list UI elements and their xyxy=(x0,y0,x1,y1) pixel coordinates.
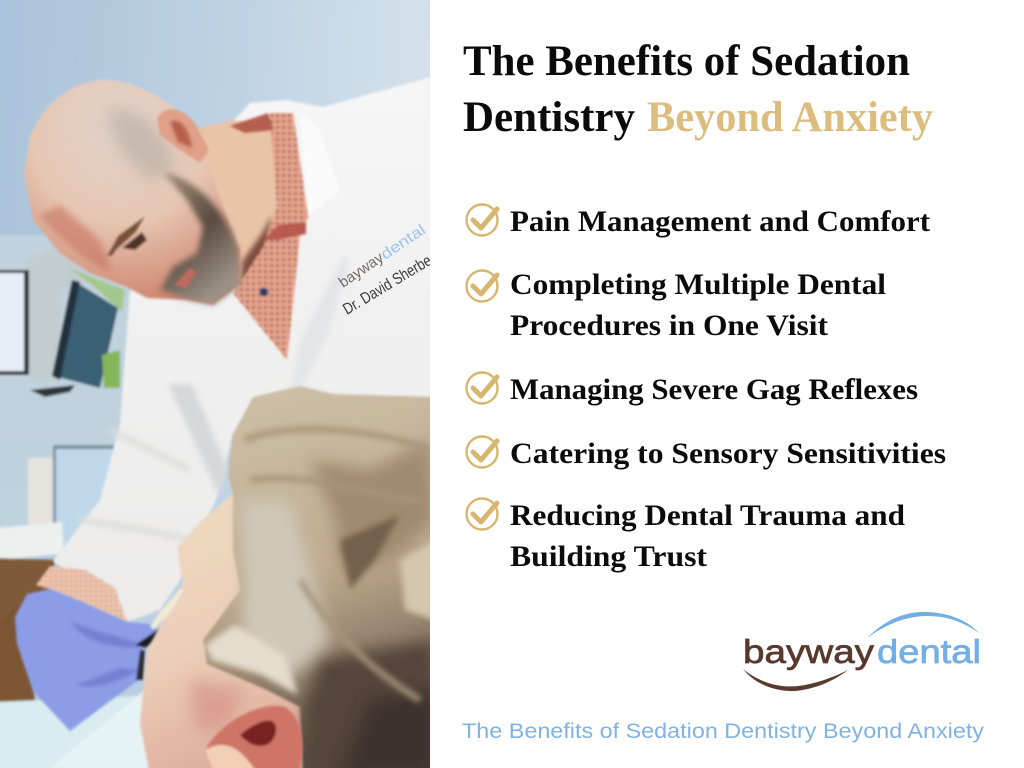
coat logo embroidery: Dr. David Sherbe xyxy=(340,252,435,318)
icon: gold check xyxy=(466,436,498,468)
dentist beard xyxy=(160,172,240,305)
patient cheek flush xyxy=(190,680,245,730)
dentist ear xyxy=(157,109,209,163)
dentist neck xyxy=(197,118,278,282)
neck shadow xyxy=(240,215,272,290)
dentist shirt cuff xyxy=(36,566,127,622)
icon: gold check xyxy=(466,372,498,404)
benefit item: multiple procedures: Completing Multiple Dental xyxy=(510,268,886,301)
dentist white coat xyxy=(53,76,435,622)
benefit item: sensory sensitivities: Catering to Sensory Sensitivities xyxy=(510,437,946,470)
dentist shirt collar xyxy=(230,113,308,360)
patient hair xyxy=(203,386,435,768)
benefit item: gag reflexes: Managing Severe Gag Reflexes xyxy=(510,373,918,406)
benefit item: dental trauma and trust xyxy=(466,498,905,573)
logo: bayway dental: dental xyxy=(877,633,981,670)
title: Dentistry xyxy=(463,94,635,141)
clinic wall xyxy=(0,0,430,768)
coat logo embroidery: bayway xyxy=(336,249,387,291)
footer caption: The Benefits of Sedation Dentistry Beyond Anxiety xyxy=(462,720,985,743)
icon: gold check xyxy=(466,204,498,236)
dentist head xyxy=(24,80,240,305)
patient ear xyxy=(205,706,302,768)
coat logo embroidery: dental xyxy=(378,221,429,263)
benefit item: dental trauma and trust: Building Trust xyxy=(510,540,707,573)
benefit item: multiple procedures xyxy=(466,268,886,342)
logo: bayway dental: bayway xyxy=(743,633,875,670)
title: The Benefits of Sedation xyxy=(463,38,910,85)
benefit item: dental trauma and trust: Reducing Dental Trauma and xyxy=(510,499,905,532)
icon: gold check xyxy=(466,498,498,530)
lower clinic background xyxy=(0,235,160,768)
title: Beyond Anxiety xyxy=(647,94,933,141)
photo panel: dentist treating a patient xyxy=(0,0,435,768)
benefit item: pain management: Pain Management and Comfort xyxy=(510,205,930,238)
patient face xyxy=(138,494,304,768)
gloved hand xyxy=(15,589,162,731)
title xyxy=(463,38,933,141)
coat logo embroidery xyxy=(338,224,430,314)
logo: bayway dental xyxy=(743,612,981,691)
icon: gold check xyxy=(466,270,498,302)
benefit item: multiple procedures: Procedures in One Visit xyxy=(510,309,828,342)
dentist eye and brow xyxy=(107,216,145,256)
patient moustache xyxy=(152,590,182,628)
